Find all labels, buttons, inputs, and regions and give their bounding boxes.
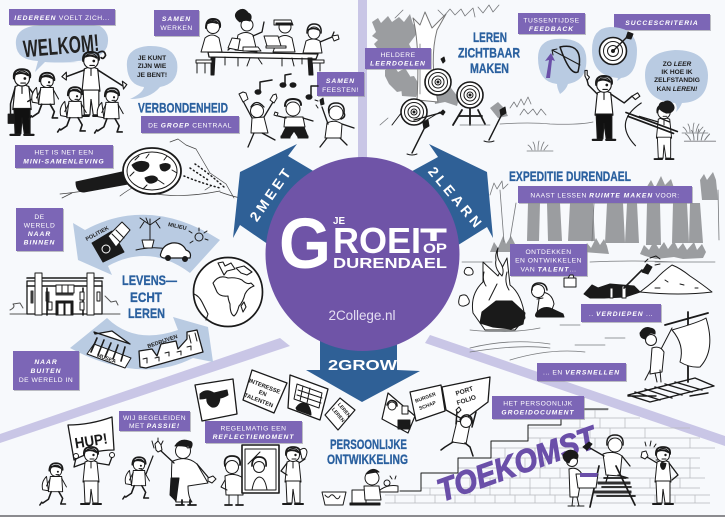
label: de groep centraal [141, 116, 240, 134]
illustration: brick wall [385, 410, 715, 503]
label: succescriteria: SUCCESCRITERIA [625, 20, 699, 27]
label: heldere leerdoelen: LEERDOELEN [370, 60, 426, 68]
label: het persoonlijk groeidocument: HET PERSOONLIJK [503, 400, 573, 408]
illustration: raft with sail and girl [628, 312, 714, 402]
figure: woman watching [281, 447, 307, 504]
logo title: T [420, 220, 447, 262]
label: heldere leerdoelen [365, 48, 432, 70]
music notes [255, 74, 318, 99]
arrow: 2learn [405, 144, 493, 247]
label: het is net een mini-samenleving [15, 145, 114, 169]
figure: jumping kid with portfolio [441, 407, 476, 456]
card: interesse en talenten: TALENTEN [243, 393, 274, 409]
card: interesse en talenten: INTERESSE [248, 378, 281, 396]
label: samen feesten: SAMEN [326, 78, 355, 85]
figure: dancer 3 [315, 98, 354, 147]
panel: 2grow persoonlijke ontwikkeling [40, 370, 715, 509]
arrow: world to school [73, 215, 220, 275]
illustration: targets [392, 57, 506, 155]
ground lines [462, 261, 715, 360]
logo title: ROEI [333, 220, 421, 261]
speech bubble: zo leer ik hoe ik zelfstandig kan leren [645, 50, 708, 112]
label: tussentijdse feedback [518, 13, 586, 35]
label: iedereen voelt zich [9, 9, 116, 26]
label: en versnellen [537, 363, 627, 382]
heading: levens-echt leren: LEREN [128, 305, 165, 321]
figure: kid running [95, 88, 123, 133]
heading: leren zichtbaar maken: LEREN [473, 29, 507, 45]
figure: girl with spread arms [62, 51, 127, 116]
icon: bedrijven factory [139, 330, 203, 368]
speech bubble: je kunt zijn wie je bent: JE BENT! [137, 72, 167, 79]
heading: verbondenheid: VERBONDENHEID [138, 100, 228, 116]
figure: girl with roller on ladder [583, 435, 630, 482]
card: portfolio [442, 377, 490, 420]
card: photo [195, 379, 237, 421]
label: ontdekken en ontwikkelen van talent: EN ONTWIKKELEN [515, 258, 582, 264]
label: iedereen voelt zich: IEDEREEN VOELT ZICH... [14, 15, 110, 22]
speech bubble: succescriteria with target [592, 27, 637, 81]
figure: dancer 1 [239, 92, 277, 147]
icon: bedrijven factory: BEDRIJVEN [147, 334, 179, 350]
label: tussentijdse feedback: FEEDBACK [529, 26, 574, 33]
label: heldere leerdoelen: HELDERE [380, 52, 416, 59]
text: toekomst painted on wall: TOEKOMST [432, 418, 603, 509]
label: wij begeleiden met passie: WIJ BEGELEIDEN [123, 415, 186, 422]
speech bubble: welkom: WELKOM! [22, 30, 100, 63]
heading: levens-echt leren [122, 272, 177, 321]
website: 2College.nl [328, 308, 396, 323]
speech bubble: je kunt zijn wie je bent: JE KUNT [138, 55, 166, 62]
label: de wereld naar binnen: DE [34, 214, 45, 221]
arrow: 2grow: 2GROW [328, 357, 398, 374]
bottom edge [0, 515, 725, 517]
speech bubble: zo leer ik hoe ik zelfstandig kan leren: IK HOE IK [661, 69, 693, 76]
icon: politiek ballot [85, 222, 130, 262]
figure: kid with backpack [58, 87, 86, 132]
card: leren leren: LEREN [330, 407, 346, 424]
label: samen werken [154, 10, 200, 37]
card: kid with box [382, 393, 415, 433]
panel: 2meet levensecht leren [10, 208, 262, 391]
logo title: G [279, 205, 331, 284]
card: portfolio: FOLIO [456, 394, 477, 407]
speech bubble: welkom [16, 24, 108, 72]
logo title [282, 217, 446, 268]
heading: leren zichtbaar maken [458, 29, 520, 76]
heading: levens-echt leren: LEVENS— [122, 272, 177, 288]
illustration: digging with shovel [564, 256, 712, 298]
table [208, 52, 318, 59]
divider: lower right diagonal [425, 335, 725, 446]
speech bubble: je kunt zijn wie je bent [127, 46, 177, 99]
icon: milieu tree, car and sun [136, 218, 208, 262]
bucket and sitting kid [322, 469, 398, 505]
arrow: 2grow [306, 340, 420, 402]
figure: kid high five [123, 456, 153, 499]
logo title: OP [423, 240, 447, 256]
illustration: magnifier over ant hill [60, 139, 240, 198]
figure: cheering adult [74, 447, 114, 504]
label: tussentijdse feedback: TUSSENTIJDSE [523, 18, 580, 24]
card: burgerschap [410, 385, 445, 421]
illustration: group around table [196, 9, 339, 75]
dancing figures [239, 92, 354, 147]
label: naar buiten de wereld in [13, 351, 80, 391]
speech bubble: feedback with bow [538, 39, 586, 94]
figure: dancer 2 [274, 99, 313, 138]
figure: curly kid [221, 456, 243, 505]
heading: levens-echt leren: ECHT [130, 289, 162, 305]
speech bubble: zo leer ik hoe ik zelfstandig kan leren: ZO LEER [663, 61, 692, 68]
icon: musea building: MUSEA [96, 353, 117, 365]
label: wij begeleiden met passie [119, 411, 191, 432]
heading: persoonlijke ontwikkeling: PERSOONLIJKE [330, 436, 407, 452]
label: de wereld naar binnen: BINNEN [24, 240, 55, 246]
label: succescriteria [614, 14, 711, 31]
icon: globe [194, 258, 262, 326]
label: naast lessen ruimte maken voor: NAAST LESSEN RUIMTE MAKEN VOOR: [530, 192, 680, 200]
hup scene [40, 417, 114, 505]
heading: persoonlijke ontwikkeling [327, 436, 408, 467]
heading: leren zichtbaar maken: ZICHTBAAR [458, 44, 520, 60]
figure: kneeling person [532, 283, 564, 317]
label: ontdekken en ontwikkelen van talent: VAN TALENT... [520, 266, 577, 274]
illustration: forest background [490, 172, 719, 259]
arrow: 2meet: 2MEET [246, 165, 294, 224]
label: regelmatig een reflectiemoment: REGELMATIG EEN [221, 426, 286, 432]
label: het persoonlijk groeidocument [492, 396, 585, 420]
illustration: campfire [459, 248, 525, 330]
illustration: stairs [400, 409, 608, 491]
illustration: tree background [372, 5, 508, 118]
label: verdiepen: .. VERDIEPEN ... [589, 311, 653, 318]
arrow: 2meet [233, 144, 320, 247]
heading: expeditie durendael: EXPEDITIE DURENDAEL [509, 168, 631, 184]
panel: 2meet verbondenheid [8, 9, 365, 198]
speech bubble: je kunt zijn wie je bent: ZIJN WIE [138, 63, 167, 70]
label: het is net een mini-samenleving: MINI-SAMENLEVING [23, 158, 105, 166]
banner: hup: HUP! [74, 431, 109, 452]
heading: leren zichtbaar maken: MAKEN [470, 60, 509, 76]
icon: milieu tree, car and sun: MILIEU [167, 222, 187, 232]
label: de groep centraal: DE GROEP CENTRAAL [148, 122, 232, 130]
figure: man with dark trousers [8, 69, 36, 135]
label: het is net een mini-samenleving: HET IS NET EEN [34, 150, 94, 156]
figure: teacher [585, 70, 640, 140]
label: de wereld naar binnen: WERELD [24, 222, 55, 230]
label: ontdekken en ontwikkelen van talent: ONTDEKKEN [525, 249, 572, 256]
figure: teacher with dark dress [155, 440, 216, 505]
speech bubble: zo leer ik hoe ik zelfstandig kan leren: ZELFSTANDIG [654, 77, 700, 84]
label: naar buiten de wereld in: NAAR [34, 359, 58, 366]
card: leren leren [325, 398, 355, 430]
label: verdiepen [581, 304, 662, 323]
label: samen werken: SAMEN [162, 16, 191, 23]
centre circle logo [266, 157, 460, 351]
heading: persoonlijke ontwikkeling: ONTWIKKELING [327, 451, 408, 467]
card: portfolio: PORT [455, 385, 474, 398]
icon: school building [10, 273, 120, 315]
arrow: 2learn: 2LEARN [425, 164, 485, 230]
high five scene [123, 438, 216, 505]
group of welcoming figures [8, 51, 127, 135]
arrow: school to world [70, 317, 213, 369]
label: ontdekken en ontwikkelen van talent [510, 244, 588, 277]
group on the right of the stairs [563, 435, 678, 507]
label: de wereld naar binnen: NAAR [28, 231, 51, 238]
figure: dark-haired girl with box [563, 450, 598, 506]
card: interesse en talenten [243, 370, 287, 413]
people behind table [201, 9, 339, 53]
figure: archer girl [625, 101, 677, 159]
divider: lower left diagonal [0, 338, 290, 443]
label: samen feesten: FEESTEN! [322, 87, 359, 94]
label: regelmatig een reflectiemoment [205, 421, 303, 444]
card: burgerschap: SCHAP [418, 400, 438, 412]
cards: interests, screen and leren [195, 370, 490, 433]
card: leren leren: LEREN [336, 402, 352, 419]
label: naar buiten de wereld in: BUITEN [31, 368, 61, 375]
card: burgerschap: BURGER [414, 391, 437, 405]
label: wij begeleiden met passie: MET PASSIE! [129, 423, 180, 430]
label: samen feesten [317, 72, 365, 97]
ground scrub lines [380, 97, 716, 151]
label: regelmatig een reflectiemoment: REFLECTIEMOMENT [213, 434, 294, 441]
mirror frame [242, 445, 279, 493]
card: interesse en talenten: EN [258, 390, 267, 398]
divider: top vertical [358, 0, 367, 170]
speech bubble: zo leer ik hoe ik zelfstandig kan leren: KAN LEREN! [657, 86, 698, 93]
logo title: DURENDAEL [333, 255, 447, 272]
card: screen [288, 375, 328, 420]
figure: older man thumbs up [641, 441, 678, 504]
panel: 2learn leren zichtbaar maken [365, 5, 716, 159]
icon: politiek ballot: POLITIEK [85, 226, 110, 243]
label: het persoonlijk groeidocument: GROEIDOCUMENT [501, 410, 575, 416]
icon: musea building [87, 331, 131, 368]
figure: kid walking [29, 73, 59, 119]
label: naast lessen ruimte maken voor [518, 186, 693, 204]
sparks [152, 438, 163, 448]
ladder [590, 466, 635, 507]
panel: 2learn expeditie durendael [459, 168, 719, 402]
label: de wereld naar binnen [16, 208, 64, 252]
logo title: JE [333, 216, 345, 227]
label: samen werken: WERKEN [160, 25, 193, 32]
mirror scene [221, 445, 307, 505]
label: naar buiten de wereld in: DE WERELD IN [19, 377, 73, 384]
label: en versnellen: ... EN VERSNELLEN [543, 370, 620, 376]
figure: kid with cap [40, 463, 66, 505]
